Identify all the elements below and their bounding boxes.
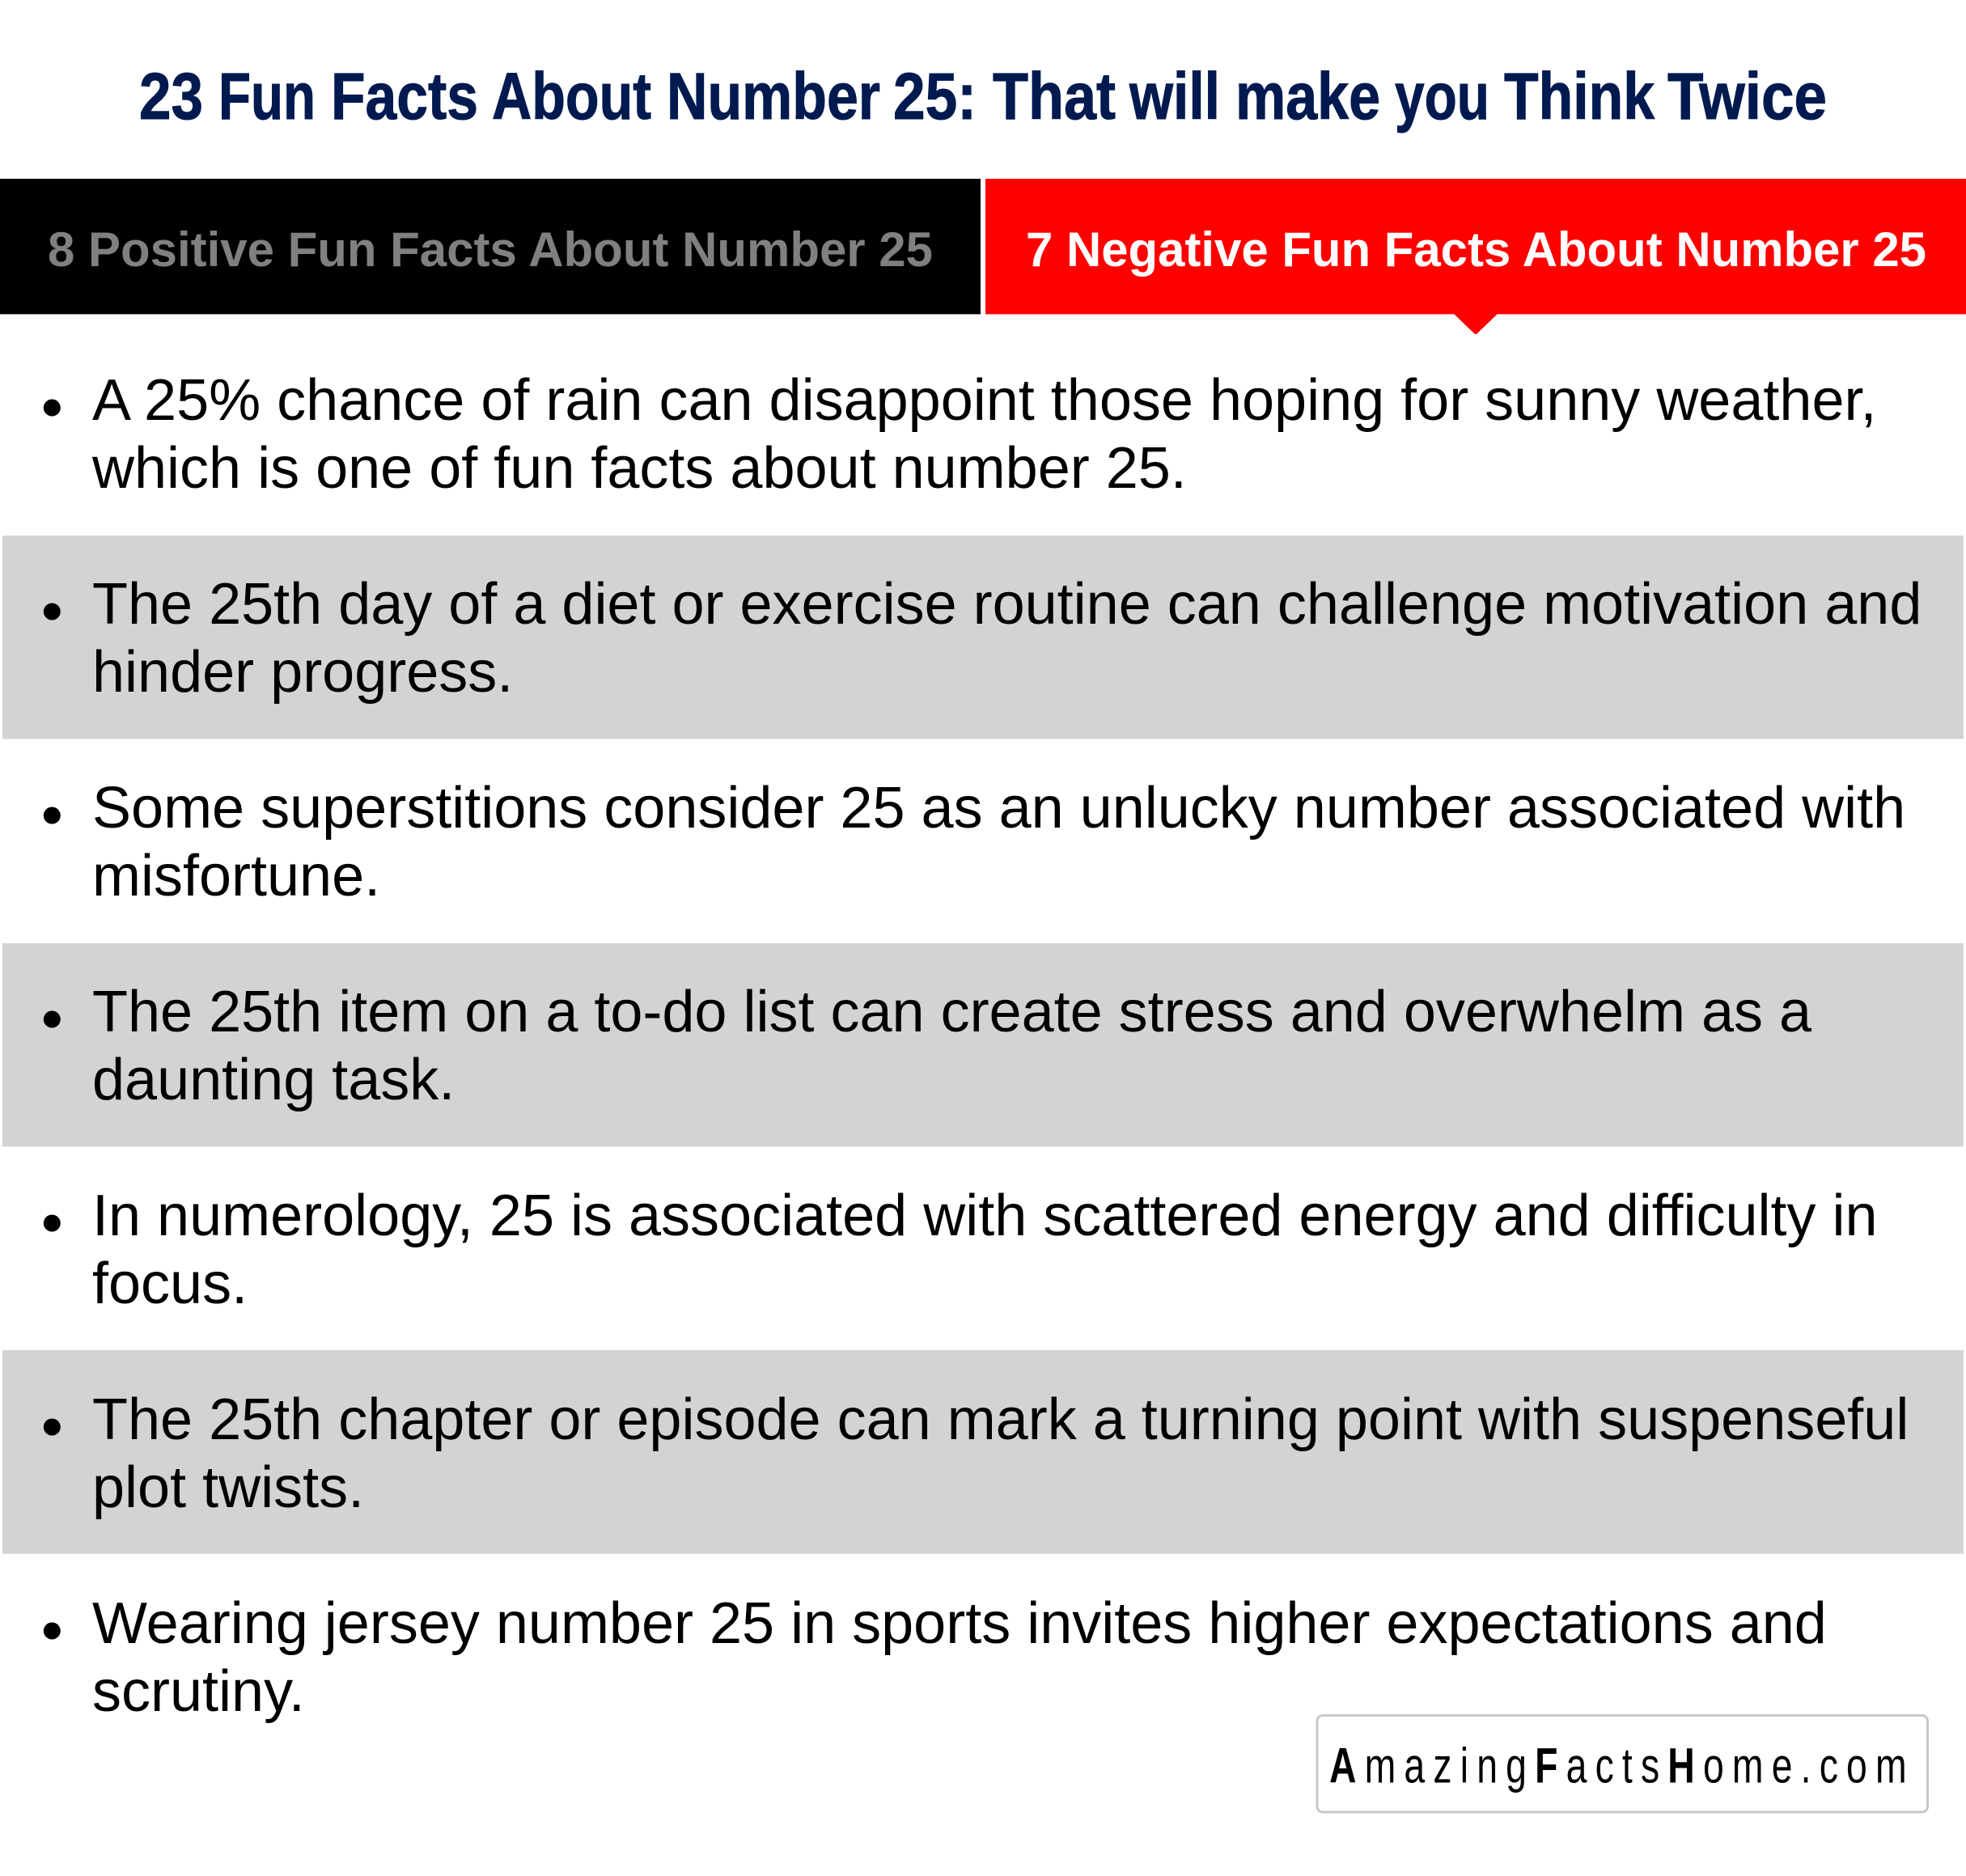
title: About (492, 60, 651, 133)
fact 2: The 25th day of a diet or exercise routine can challenge motivation and (92, 572, 1922, 637)
title: 23 (139, 60, 203, 133)
tab: positive facts: 8 Positive Fun Facts About Number 25 (48, 222, 933, 277)
title: Twice (1667, 60, 1827, 133)
title: will (1129, 60, 1220, 133)
title: Number (667, 60, 880, 133)
fact 7: scrutiny. (92, 1659, 305, 1724)
fact 6 (2, 1350, 1964, 1554)
title: Think (1504, 60, 1655, 133)
title: Fun (218, 60, 316, 133)
fact 3: misfortune. (92, 844, 380, 908)
fact 2 (2, 536, 1964, 739)
fact 2: hinder progress. (92, 640, 513, 705)
fact 7: Wearing jersey number 25 in sports invites higher expectations and (92, 1591, 1827, 1656)
fact 3: Some superstitions consider 25 as an unlucky number associated with (92, 776, 1905, 841)
fact 1: A 25% chance of rain can disappoint those hoping for sunny weather, (92, 368, 1877, 433)
title: make (1235, 60, 1380, 133)
fact 7 (44, 1591, 1827, 1724)
tab: positive facts (0, 179, 981, 314)
fact 6: plot twists. (92, 1455, 364, 1520)
logo: AmazingFactsHome.com: AmazingFactsHome.com (1329, 1738, 1907, 1793)
fact 4: daunting task. (92, 1048, 455, 1112)
logo: AmazingFactsHome.com (1317, 1715, 1927, 1812)
fact 5: In numerology, 25 is associated with scattered energy and difficulty in (92, 1184, 1878, 1248)
fact 6: The 25th chapter or episode can mark a turning point with suspenseful (92, 1387, 1909, 1452)
fact 1 (44, 368, 1876, 501)
title: you (1395, 60, 1489, 133)
fact 5 (44, 1184, 1878, 1316)
title: Facts (331, 60, 478, 133)
fact 4 (2, 943, 1964, 1146)
tab: negative facts (active): 7 Negative Fun Facts About Number 25 (1026, 222, 1926, 277)
fact 1: which is one of fun facts about number 25. (91, 436, 1187, 501)
title (139, 60, 1827, 133)
title: That (993, 60, 1116, 133)
fact 4: The 25th item on a to-do list can create stress and overwhelm as a (92, 980, 1812, 1044)
title: 25: (893, 60, 977, 133)
fact 3 (44, 776, 1905, 908)
tab: negative facts (active) (985, 179, 1966, 334)
fact 5: focus. (92, 1251, 248, 1316)
